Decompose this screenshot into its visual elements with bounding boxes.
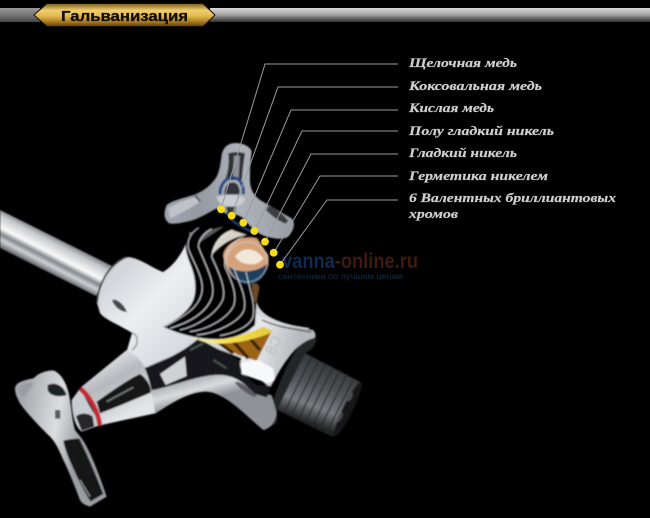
stem bbox=[72, 388, 101, 432]
collar reflection bbox=[112, 300, 127, 312]
label: alkaline copper: Щелочная медь bbox=[408, 55, 517, 70]
arm sheen bbox=[168, 198, 200, 218]
lever blade recess bbox=[63, 439, 103, 501]
label: bright nickel: Гладкий никель bbox=[408, 145, 517, 160]
label: acid copper: Кислая медь bbox=[408, 100, 494, 115]
cross handle bbox=[165, 143, 294, 239]
window reflection bbox=[160, 357, 187, 385]
lower body section bbox=[15, 327, 277, 507]
dark reflection band bbox=[143, 338, 272, 397]
watermark tagline: сантехника по лучшим ценам bbox=[278, 271, 403, 281]
label: hexavalent chrome second line: хромов bbox=[408, 206, 458, 221]
peach layer bbox=[223, 238, 269, 283]
watermark bbox=[278, 250, 418, 281]
watermark logo ring bbox=[227, 242, 267, 282]
layer labels bbox=[408, 55, 617, 221]
gold foil wedge bbox=[213, 330, 271, 361]
watermark site name: vanna-online.ru bbox=[282, 250, 418, 273]
title badge bbox=[34, 4, 215, 26]
underside oval bbox=[234, 380, 258, 399]
underside strip bbox=[152, 375, 277, 430]
blue dome bbox=[220, 178, 243, 194]
red ring bbox=[80, 388, 100, 426]
threaded outlet bbox=[263, 333, 366, 438]
metal collar bbox=[217, 195, 245, 207]
leader lines bbox=[221, 64, 398, 265]
outlet flange logo: 8Ɔ bbox=[262, 333, 286, 358]
main body bbox=[97, 232, 310, 368]
collar ring bbox=[97, 257, 126, 303]
blue arc under handle bbox=[226, 213, 252, 232]
spout pipe bbox=[0, 210, 112, 296]
right arm slot bbox=[266, 206, 288, 224]
lever handle bbox=[15, 370, 107, 507]
yellow marker dots bbox=[217, 205, 284, 269]
layer caps bbox=[198, 227, 223, 243]
label: coke copper: Коксовальная медь bbox=[408, 78, 542, 93]
central tube bbox=[225, 152, 245, 180]
title badge: Гальванизация bbox=[61, 8, 188, 25]
bronze tail bbox=[252, 283, 259, 303]
neck bbox=[82, 350, 155, 425]
layer lines bbox=[165, 228, 254, 336]
neck dark band bbox=[97, 374, 151, 413]
header bar bbox=[0, 4, 650, 26]
white panel bbox=[240, 360, 275, 383]
label: nickel sealing: Герметика никелем bbox=[408, 168, 548, 183]
label: hexavalent chrome: 6 Валентных бриллиантовых bbox=[409, 190, 617, 205]
faucet illustration bbox=[0, 143, 366, 507]
flared outlet shoulder bbox=[240, 312, 315, 388]
label: semi-bright nickel: Полу гладкий никель bbox=[408, 123, 554, 138]
cutaway section with plating layers bbox=[163, 222, 270, 339]
